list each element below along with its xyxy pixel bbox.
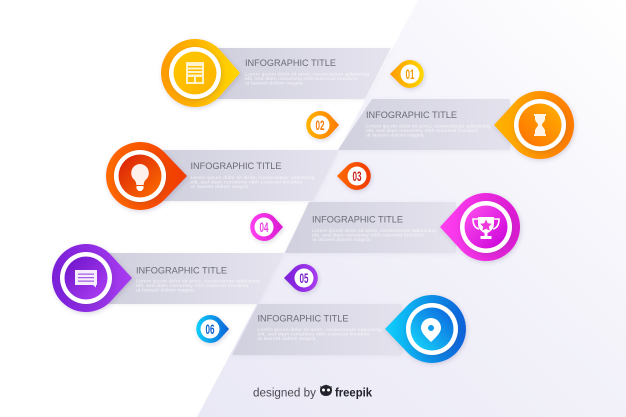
text block 2: ut laoreet dolore magna bbox=[366, 132, 425, 138]
icon: orange pin with hourglass bbox=[494, 91, 574, 159]
heading 2: INFOGRAPHIC TITLE bbox=[366, 109, 457, 120]
panel: item 2 bbox=[338, 99, 510, 150]
number badge 03: 03 bbox=[352, 169, 362, 184]
text block 1: Lorem ipsum dolor sit amet, consectetuer adipiscing bbox=[245, 72, 370, 76]
number badge 04 bbox=[250, 213, 283, 241]
number badge 04: 04 bbox=[260, 220, 269, 235]
icon: purple pin with chat bubble bbox=[52, 244, 132, 312]
bar 1 bbox=[205, 48, 391, 99]
text block 5: Lorem ipsum dolor sit amet, consectetuer adipiscing bbox=[136, 278, 261, 284]
text block 3: elit, sed diam nonummy nibh euismod tincidunt bbox=[190, 180, 303, 184]
text block 3: ut laoreet dolore magna bbox=[190, 184, 249, 189]
icon: magenta pin with trophy bbox=[440, 193, 520, 261]
panel: item 5 bbox=[95, 253, 284, 304]
bar 4 bbox=[285, 202, 456, 253]
panel: item 1 bbox=[205, 48, 391, 99]
number badge 05: 05 bbox=[300, 271, 309, 286]
number badge 02 bbox=[306, 111, 339, 139]
text block 2: Lorem ipsum dolor sit amet, consectetuer adipiscing bbox=[366, 124, 491, 128]
text block 5 bbox=[136, 278, 261, 292]
bar 2 bbox=[338, 99, 510, 150]
text block 4: elit, sed diam nonummy nibh euismod tincidunt bbox=[312, 232, 425, 238]
icon: freepik mascot bbox=[320, 384, 332, 396]
number badge 05 bbox=[284, 264, 318, 292]
credit: designed by freepik bbox=[253, 384, 372, 400]
credit: designed by freepik: designed by bbox=[253, 388, 316, 400]
text block 4: ut laoreet dolore magna bbox=[312, 237, 371, 242]
bar 5 bbox=[95, 253, 284, 304]
text block 3 bbox=[190, 175, 315, 189]
number badge 06: 06 bbox=[206, 322, 215, 337]
text block 3: Lorem ipsum dolor sit amet, consectetuer adipiscing bbox=[190, 175, 315, 180]
text block 1: ut laoreet dolore magna bbox=[245, 80, 304, 86]
text block 2 bbox=[366, 124, 491, 138]
number badge 03 bbox=[337, 162, 371, 190]
panel: item 4 bbox=[285, 202, 456, 253]
number badge 06 bbox=[196, 315, 229, 343]
credit: designed by freepik: freepik bbox=[335, 386, 372, 400]
text block 4: Lorem ipsum dolor sit amet, consectetuer adipiscing bbox=[312, 228, 437, 233]
text block 5: elit, sed diam nonummy nibh euismod tincidunt bbox=[136, 283, 249, 288]
icon: blue pin with map marker bbox=[385, 295, 466, 363]
heading 3: INFOGRAPHIC TITLE bbox=[190, 160, 282, 171]
text block 4 bbox=[312, 228, 437, 242]
text block 2: elit, sed diam nonummy nibh euismod tincidunt bbox=[366, 128, 479, 133]
text block 6: Lorem ipsum dolor sit amet, consectetuer adipiscing bbox=[258, 327, 382, 332]
bar 3 bbox=[150, 150, 339, 201]
text block 6: elit, sed diam nonummy nibh euismod tincidunt bbox=[258, 332, 370, 336]
number badge 01: 01 bbox=[406, 67, 415, 82]
heading 5: INFOGRAPHIC TITLE bbox=[136, 264, 227, 276]
panel: item 3 bbox=[150, 150, 339, 201]
number badge 01 bbox=[390, 60, 424, 88]
icon: red pin with light bulb bbox=[106, 142, 187, 210]
heading 6: INFOGRAPHIC TITLE bbox=[258, 312, 348, 324]
heading 4: INFOGRAPHIC TITLE bbox=[312, 214, 403, 224]
text block 6: ut laoreet dolore magna bbox=[258, 336, 316, 341]
icon: yellow pin with document bbox=[161, 39, 240, 107]
text block 5: ut laoreet dolore magna bbox=[136, 288, 195, 292]
text block 1 bbox=[245, 72, 370, 86]
text block 1: elit, sed diam nonummy nibh euismod tincidunt bbox=[245, 76, 358, 81]
bar 6 bbox=[232, 304, 402, 355]
heading 1: INFOGRAPHIC TITLE bbox=[245, 57, 336, 68]
panel: item 6 bbox=[232, 304, 402, 355]
number badge 02: 02 bbox=[316, 118, 324, 133]
text block 6 bbox=[258, 327, 382, 341]
